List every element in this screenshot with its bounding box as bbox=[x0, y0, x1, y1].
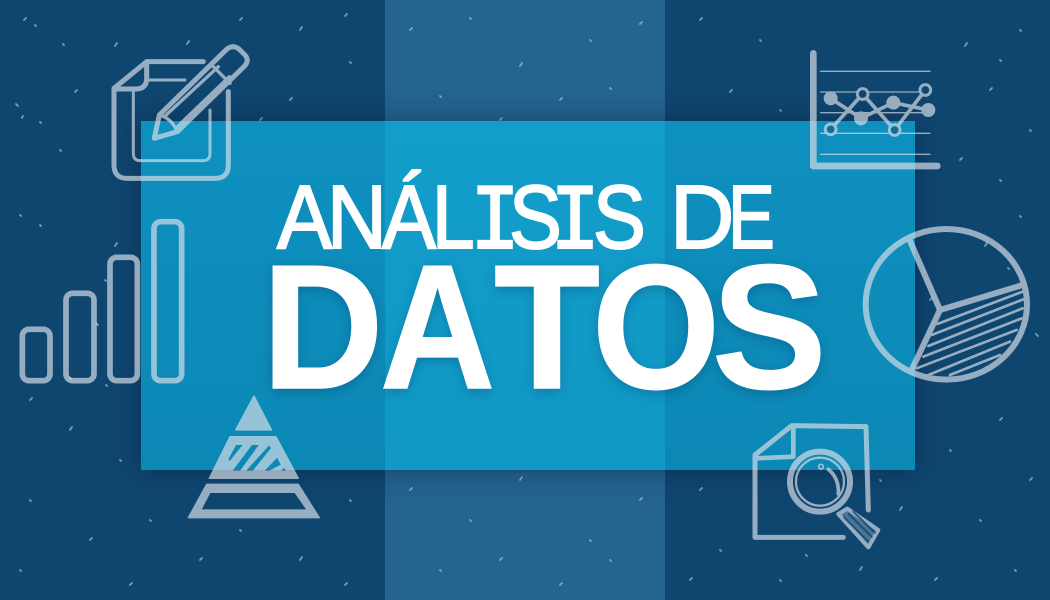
title line: DATOS: D bbox=[262, 228, 383, 426]
title line: ANÁLISIS DE: E bbox=[728, 168, 775, 268]
title line: DATOS: T bbox=[494, 228, 599, 426]
title line: DATOS: S bbox=[712, 228, 827, 426]
center vertical band bbox=[385, 0, 665, 600]
title line: DATOS: A bbox=[380, 228, 495, 426]
title line: ANÁLISIS DE: N bbox=[327, 168, 387, 268]
panel: title banner bbox=[141, 121, 915, 470]
title line: ANÁLISIS DE: L bbox=[432, 168, 475, 268]
title line: ANÁLISIS DE: A bbox=[277, 168, 332, 268]
title line: DATOS: O bbox=[592, 228, 720, 426]
title line: ANÁLISIS DE: S bbox=[509, 168, 562, 268]
title line: ANÁLISIS DE: Á bbox=[382, 168, 436, 268]
title line: ANÁLISIS DE: D bbox=[670, 168, 734, 268]
panel: lighter center section bbox=[385, 121, 665, 470]
title line: ANÁLISIS DE: I bbox=[550, 171, 600, 277]
title line: ANÁLISIS DE: S bbox=[593, 168, 646, 268]
title line: ANÁLISIS DE: I bbox=[470, 171, 520, 277]
